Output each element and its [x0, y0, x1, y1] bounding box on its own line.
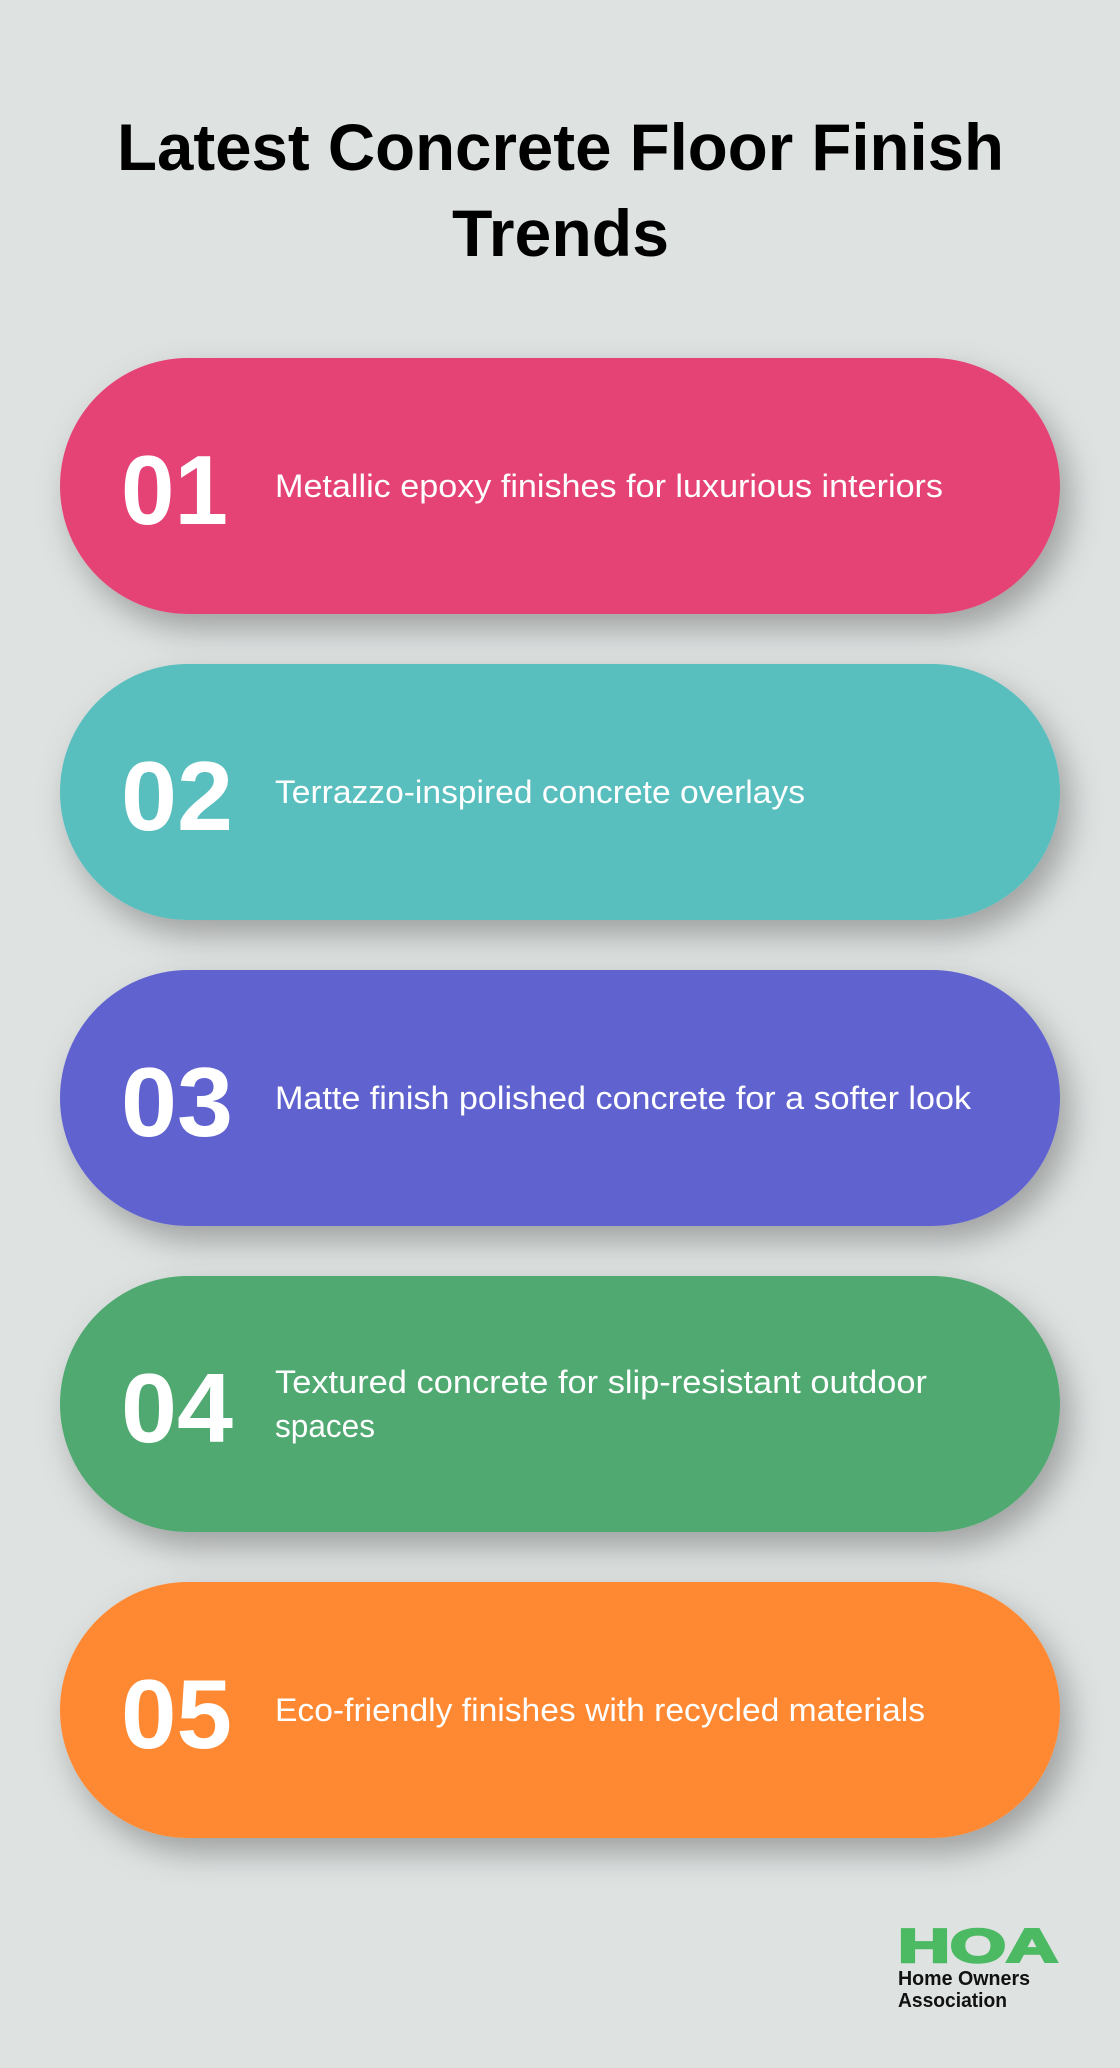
title: Trends — [452, 196, 669, 270]
pill 01 — [60, 358, 1060, 614]
number 04: 04 — [121, 1353, 233, 1463]
logo: HOA Home Owners Association: Association — [898, 1990, 1007, 2012]
text 04 — [275, 1364, 927, 1444]
logo: HOA Home Owners Association: HOA — [898, 1919, 1058, 1972]
number 05: 05 — [121, 1659, 232, 1769]
text 05: Eco-friendly finishes with recycled materials — [275, 1692, 925, 1728]
panel: trend 01 — [60, 358, 1060, 614]
logo: HOA Home Owners Association — [898, 1919, 1058, 2012]
text 02: Terrazzo-inspired concrete overlays — [275, 774, 805, 810]
pill 03 — [60, 970, 1060, 1226]
panel: trend 04 — [60, 1276, 1060, 1532]
text 04: Textured concrete for slip-resistant outdoor — [275, 1364, 927, 1400]
number 01: 01 — [121, 435, 228, 545]
text 04: spaces — [275, 1408, 375, 1444]
logo: HOA Home Owners Association: Home Owners — [898, 1968, 1030, 1990]
text 03: Matte finish polished concrete for a softer look — [275, 1080, 972, 1116]
pill 02 — [60, 664, 1060, 920]
panel: trend 05 — [60, 1582, 1060, 1838]
text 01: Metallic epoxy finishes for luxurious interiors — [275, 468, 943, 504]
panel: trend 03 — [60, 970, 1060, 1226]
pill 05 — [60, 1582, 1060, 1838]
number 02: 02 — [121, 741, 233, 851]
title: Latest Concrete Floor Finish — [117, 110, 1004, 184]
title — [117, 110, 1004, 270]
number 03: 03 — [121, 1047, 233, 1157]
pill 04 — [60, 1276, 1060, 1532]
panel: trend 02 — [60, 664, 1060, 920]
